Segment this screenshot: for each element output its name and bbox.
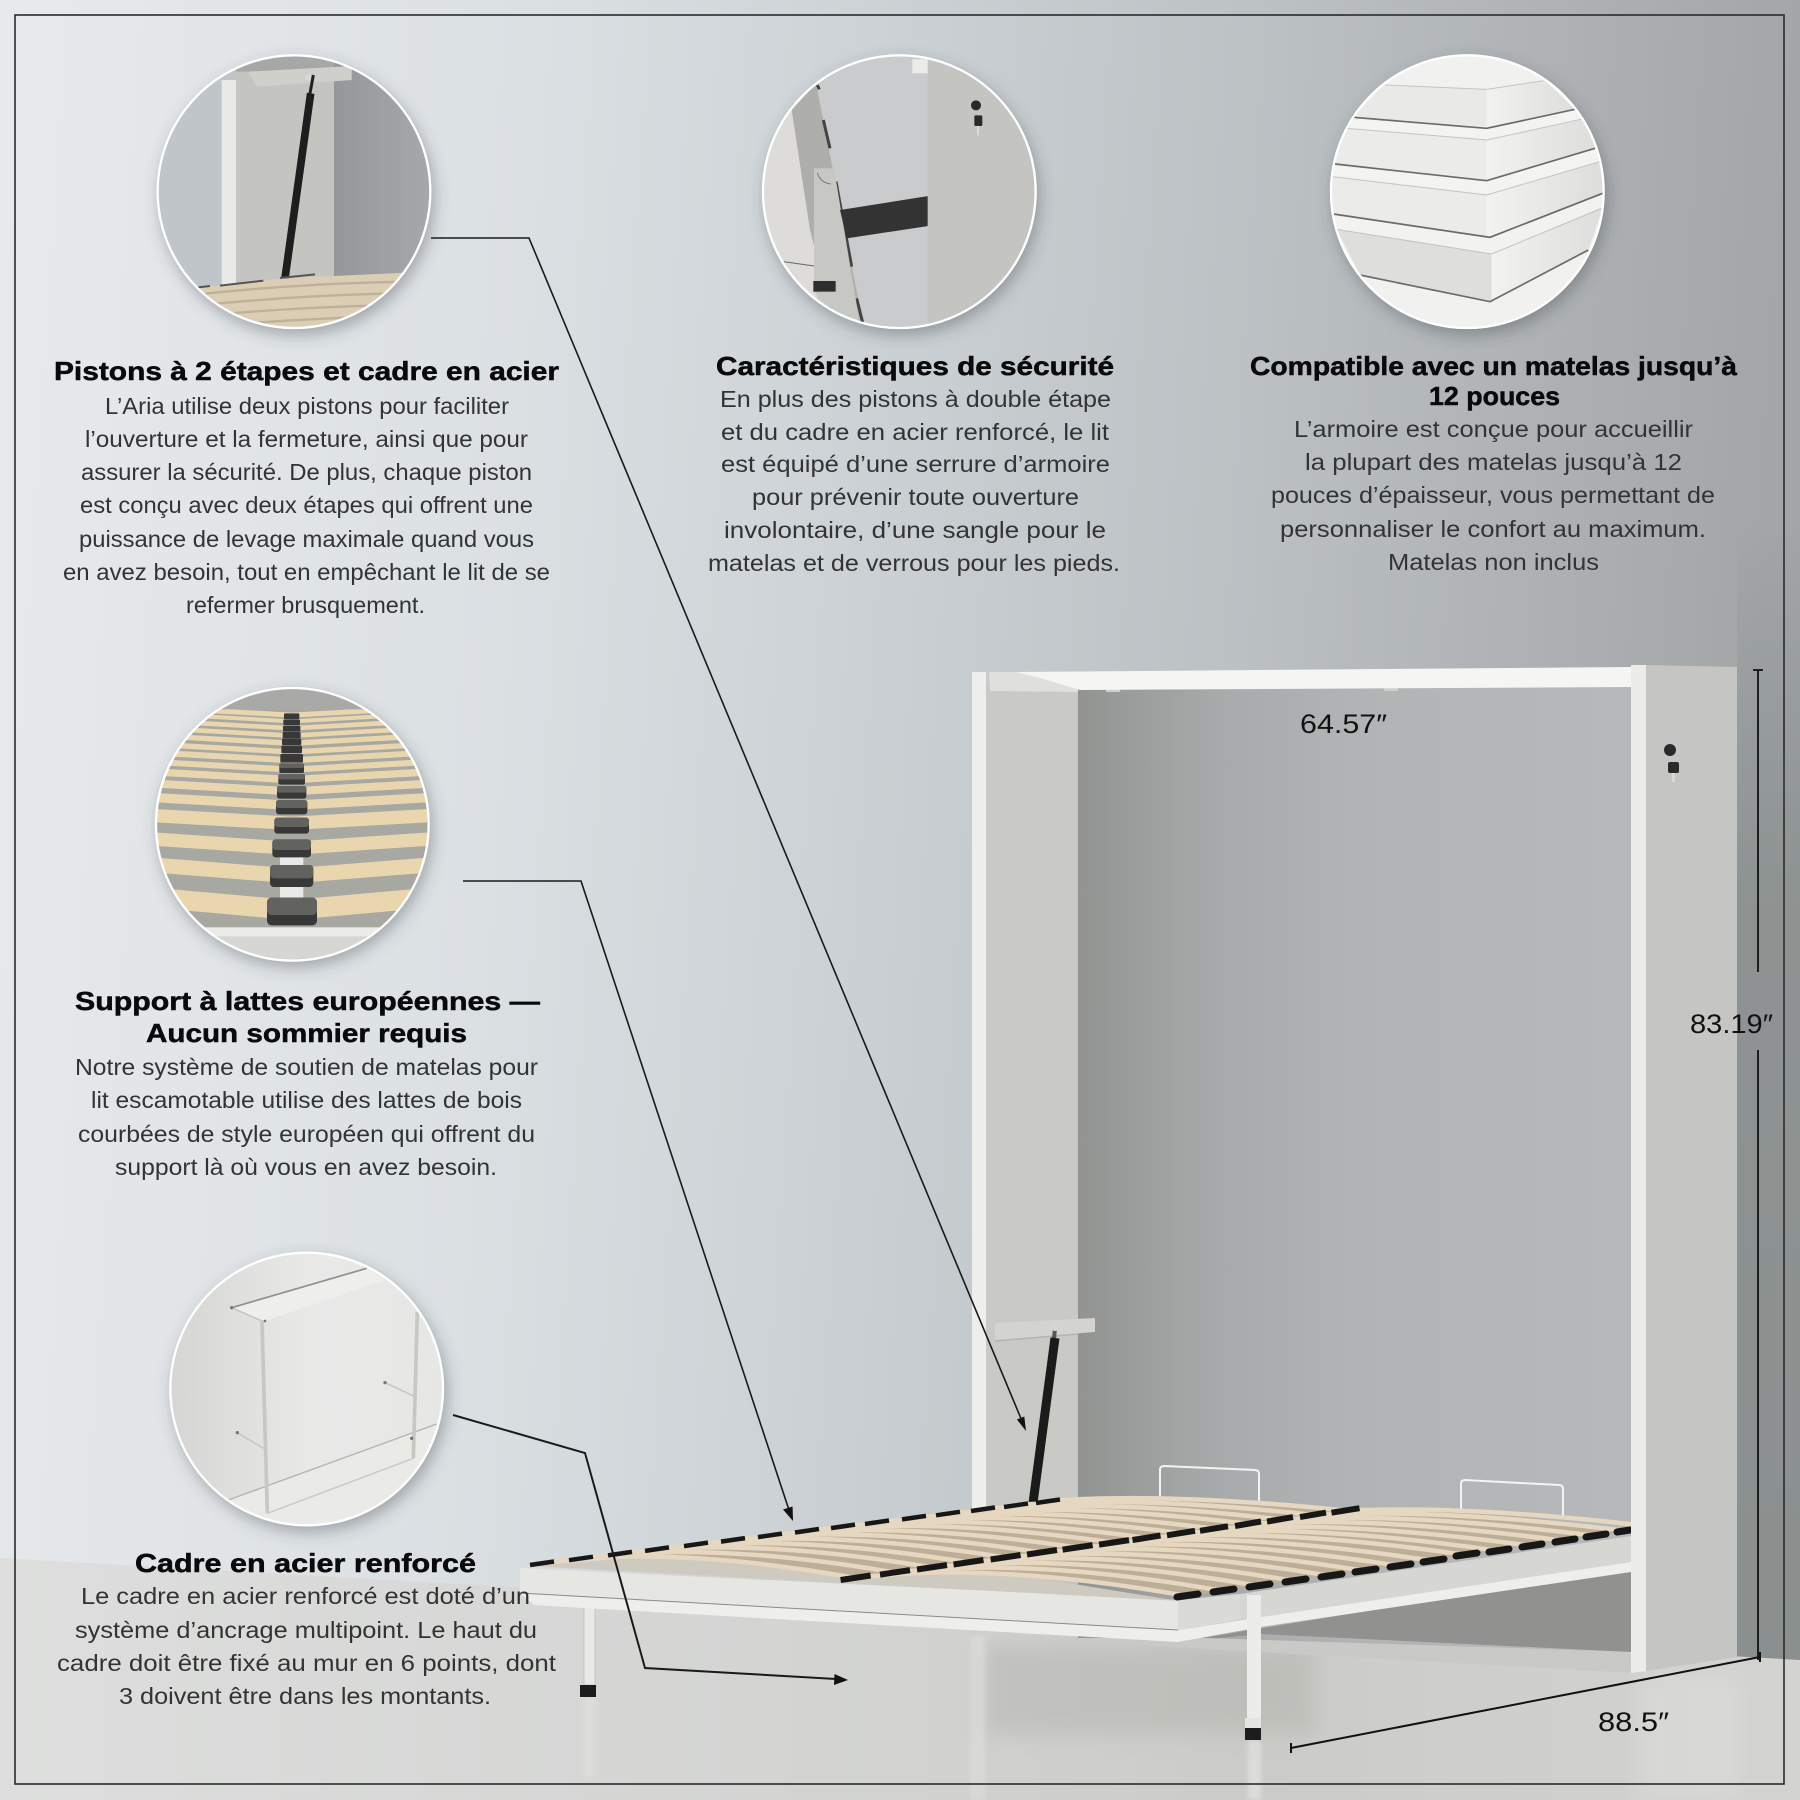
- foot lock hoops: [1160, 1466, 1563, 1518]
- black slat holders: [530, 1500, 1630, 1597]
- text block: slats: support là où vous en avez besoin.: [115, 1154, 497, 1180]
- gas piston: [1033, 1323, 1059, 1503]
- right leg: [1245, 1595, 1261, 1740]
- photo circle: safety strap and lock: [757, 53, 1046, 343]
- text block: slats: courbées de style européen qui offrent du: [78, 1121, 535, 1147]
- text block: slats: lit escamotable utilise des lattes de bois: [91, 1087, 522, 1113]
- text block: safety: [708, 386, 1120, 576]
- photo circle: steel frame: [163, 1248, 457, 1542]
- cabinet top rail: [1016, 667, 1631, 690]
- text block: pistons: puissance de levage maximale quand vous: [79, 526, 534, 552]
- leader line: pistons: [431, 238, 1026, 1431]
- text block: safety: pour prévenir toute ouverture: [752, 484, 1079, 510]
- photo circle: european slats: [148, 683, 442, 977]
- heading: safety: Caractéristiques de sécurité: [716, 351, 1114, 381]
- dimension: height: [1690, 670, 1773, 1660]
- text block: slats: [75, 1054, 538, 1180]
- text block: mattress: personnaliser le confort au maximum.: [1280, 516, 1706, 542]
- dimension: height: 83.19″: [1690, 1009, 1773, 1039]
- text block: pistons: en avez besoin, tout en empêchant le lit de se: [63, 559, 550, 585]
- heading: slats: [75, 986, 540, 1048]
- text block: steel frame: système d’ancrage multipoint. Le haut du: [75, 1617, 537, 1643]
- text block: safety: est équipé d’une serrure d’armoire: [721, 451, 1110, 477]
- text block: steel frame: [57, 1583, 557, 1709]
- text block: safety: involontaire, d’une sangle pour le: [724, 517, 1106, 543]
- wall bed illustration: [520, 665, 1737, 1740]
- heading: mattress: [1250, 351, 1738, 411]
- left leg: [580, 1605, 596, 1697]
- text block: mattress: la plupart des matelas jusqu’à 12: [1305, 449, 1682, 475]
- text block: pistons: l’ouverture et la fermeture, ainsi que pour: [85, 426, 528, 452]
- text block: pistons: refermer brusquement.: [186, 592, 425, 618]
- heading: mattress: Compatible avec un matelas jusqu’à: [1250, 351, 1738, 381]
- cabinet right side: [1631, 665, 1737, 1673]
- leader line: steel frame: [453, 1415, 848, 1685]
- text block: safety: et du cadre en acier renforcé, le lit: [721, 419, 1110, 445]
- dimension: depth: [1291, 1652, 1760, 1753]
- text block: steel frame: 3 doivent être dans les montants.: [119, 1683, 491, 1709]
- text block: mattress: pouces d’épaisseur, vous permettant de: [1271, 482, 1715, 508]
- photo circle: stacked mattresses: [1326, 54, 1614, 342]
- text block: pistons: [63, 393, 550, 618]
- cabinet back panel: [1078, 685, 1631, 1652]
- dimension: depth: 88.5″: [1598, 1707, 1670, 1737]
- text block: slats: Notre système de soutien de matelas pour: [75, 1054, 538, 1080]
- lower plinth: [1100, 1638, 1632, 1673]
- text block: safety: En plus des pistons à double étape: [720, 386, 1111, 412]
- text block: pistons: assurer la sécurité. De plus, chaque piston: [81, 459, 532, 485]
- heading: slats: Aucun sommier requis: [146, 1018, 467, 1048]
- heading: mattress: 12 pouces: [1429, 381, 1560, 411]
- text block: pistons: est conçu avec deux étapes qui offrent une: [80, 492, 533, 518]
- piston bracket: [995, 1318, 1095, 1341]
- text block: pistons: L’Aria utilise deux pistons pour faciliter: [105, 393, 509, 419]
- leader line: slats: [463, 881, 793, 1521]
- text block: steel frame: cadre doit être fixé au mur en 6 points, dont: [57, 1650, 557, 1676]
- text block: mattress: L’armoire est conçue pour accueillir: [1294, 416, 1693, 442]
- text block: steel frame: Le cadre en acier renforcé est doté d’un: [81, 1583, 530, 1609]
- heading: slats: Support à lattes européennes —: [75, 986, 540, 1016]
- photo circle: piston detail: [150, 51, 444, 345]
- heading: pistons: Pistons à 2 étapes et cadre en acier: [54, 356, 559, 386]
- wooden slats: [542, 1498, 1655, 1596]
- text block: mattress: [1271, 416, 1715, 575]
- bed platform: [520, 1536, 1631, 1642]
- text block: safety: matelas et de verrous pour les pieds.: [708, 550, 1120, 576]
- dimension: width: 64.57″: [1300, 709, 1387, 739]
- shaded space under the bed: [1178, 1568, 1631, 1652]
- cabinet left side: [972, 672, 1398, 1515]
- heading: steel frame: Cadre en acier renforcé: [135, 1548, 476, 1578]
- text block: mattress: Matelas non inclus: [1388, 549, 1599, 575]
